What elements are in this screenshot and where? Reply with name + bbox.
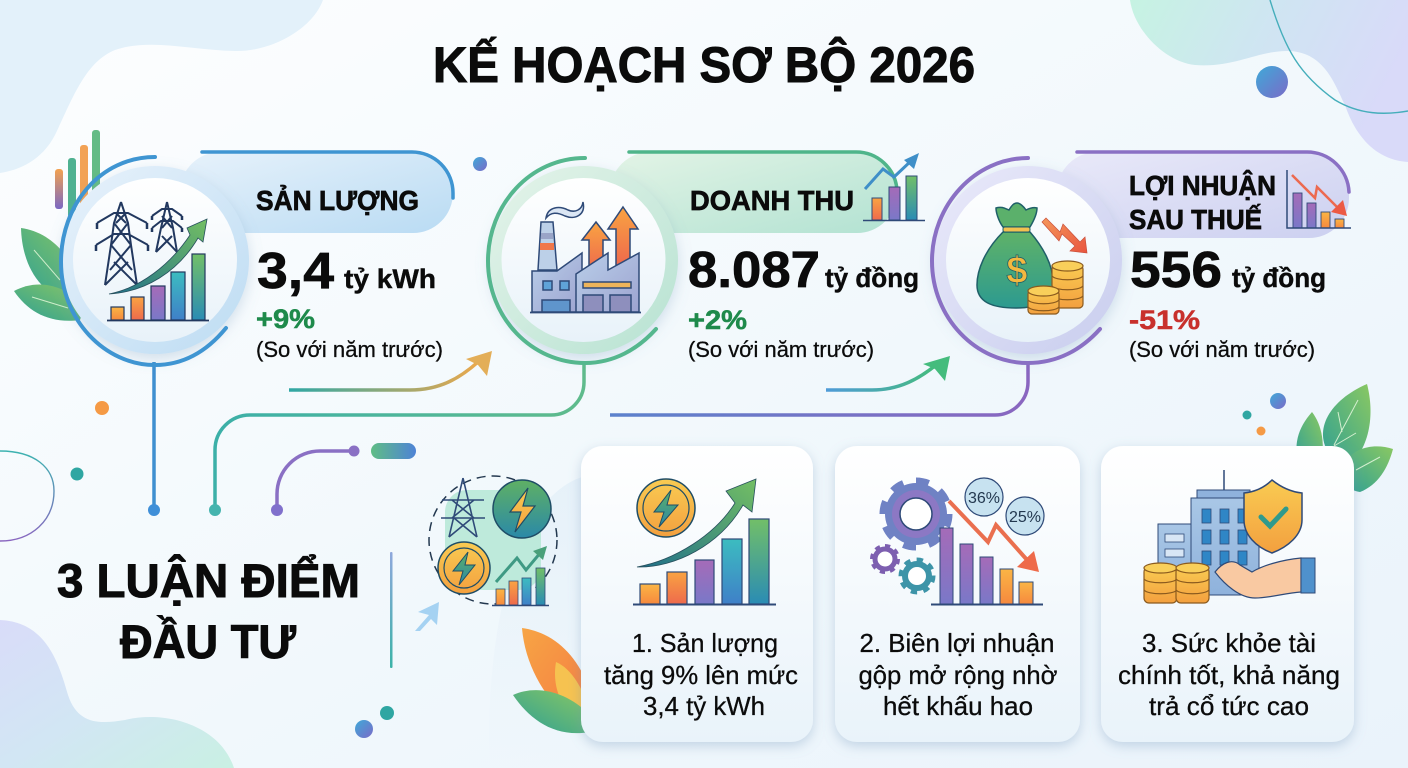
connector: teal line from revenue circle bbox=[209, 362, 584, 516]
panel: card 2 bbox=[835, 446, 1080, 742]
icon: mini bar chart with arrow bbox=[863, 153, 925, 220]
circle with icon bbox=[61, 157, 249, 365]
header pill bbox=[180, 152, 453, 233]
decorative dots bbox=[70, 66, 1288, 738]
metric unit: tỷ kWh bbox=[344, 264, 436, 294]
panel: doanh thu bbox=[488, 152, 925, 363]
card text bbox=[604, 628, 798, 721]
decorative mini bars bbox=[55, 130, 100, 218]
card text bbox=[858, 628, 1058, 721]
card text: trả cổ tức cao bbox=[1149, 691, 1309, 721]
decorative leaves left bbox=[14, 228, 85, 321]
icon: gears with falling chart bbox=[873, 478, 1044, 604]
metric value: 3,4 bbox=[257, 242, 335, 299]
change percent: +2% bbox=[688, 305, 747, 335]
icon: gears with falling chart: 36% bbox=[968, 490, 1000, 507]
arrow: output to revenue bbox=[289, 351, 492, 390]
connector: blue line from output circle bbox=[148, 362, 160, 516]
panel: card 3 bbox=[1101, 446, 1354, 742]
connector: purple line from profit circle bbox=[610, 362, 1028, 415]
icon: coin with growth chart bbox=[633, 479, 776, 604]
metric value: 556 bbox=[1130, 241, 1222, 298]
change percent: -51% bbox=[1129, 305, 1200, 335]
metric value: 8.087 bbox=[688, 241, 820, 298]
card text: 3. Sức khỏe tài bbox=[1142, 628, 1316, 658]
panel: loi nhuan sau thue bbox=[932, 152, 1351, 363]
metric unit: tỷ đồng bbox=[1232, 263, 1326, 293]
heading: investment theses: ĐẦU TƯ bbox=[120, 615, 296, 668]
icon: gears with falling chart: 25% bbox=[1009, 509, 1041, 526]
comparison note: (So với năm trước) bbox=[256, 337, 443, 362]
card text: 1. Sản lượng bbox=[632, 628, 778, 658]
title: KẾ HOẠCH SƠ BỘ 2026 bbox=[433, 36, 975, 93]
decorative leaves bbox=[513, 628, 595, 735]
card text: hết khấu hao bbox=[883, 691, 1033, 721]
header pill bbox=[1057, 152, 1349, 238]
leaves right bbox=[1296, 384, 1393, 492]
header pill bbox=[610, 152, 897, 233]
arrow: revenue to profit bbox=[826, 356, 950, 390]
comparison note: (So với năm trước) bbox=[688, 337, 874, 362]
header pill: DOANH THU bbox=[690, 185, 854, 216]
divider bbox=[390, 552, 392, 668]
connector: purple branch with dots bbox=[271, 443, 416, 516]
icon: energy cluster bbox=[429, 476, 557, 606]
icon: falling bar chart bbox=[1287, 170, 1351, 228]
heading: investment theses bbox=[57, 554, 360, 668]
header pill: SẢN LƯỢNG bbox=[256, 184, 419, 216]
icon: pale arrow bbox=[415, 602, 439, 631]
card text: gộp mở rộng nhờ bbox=[858, 660, 1058, 690]
icon: towers and growth chart bbox=[96, 202, 209, 320]
header pill: SAU THUẾ bbox=[1129, 204, 1262, 235]
metric unit: tỷ đồng bbox=[825, 263, 919, 293]
panel: san luong bbox=[61, 152, 453, 365]
card text bbox=[1118, 628, 1340, 721]
header pill: LỢI NHUẬN bbox=[1129, 170, 1276, 201]
card text: 3,4 tỷ kWh bbox=[643, 691, 765, 721]
card text: chính tốt, khả năng bbox=[1118, 660, 1340, 690]
change percent: +9% bbox=[256, 304, 315, 334]
heading: investment theses: 3 LUẬN ĐIỂM bbox=[57, 554, 360, 607]
comparison note: (So với năm trước) bbox=[1129, 337, 1315, 362]
card text: tăng 9% lên mức bbox=[604, 660, 798, 690]
panel: card 1 bbox=[581, 446, 813, 742]
icon: money bag with falling arrow and coins bbox=[977, 203, 1087, 314]
icon: building, shield, hand and coins bbox=[1144, 470, 1315, 603]
circle with icon bbox=[488, 158, 678, 363]
icon: factory with arrows bbox=[530, 202, 641, 312]
circle with icon bbox=[932, 158, 1122, 363]
card text: 2. Biên lợi nhuận bbox=[860, 628, 1054, 658]
icon: money bag with falling arrow and coins: $ bbox=[1006, 250, 1028, 292]
